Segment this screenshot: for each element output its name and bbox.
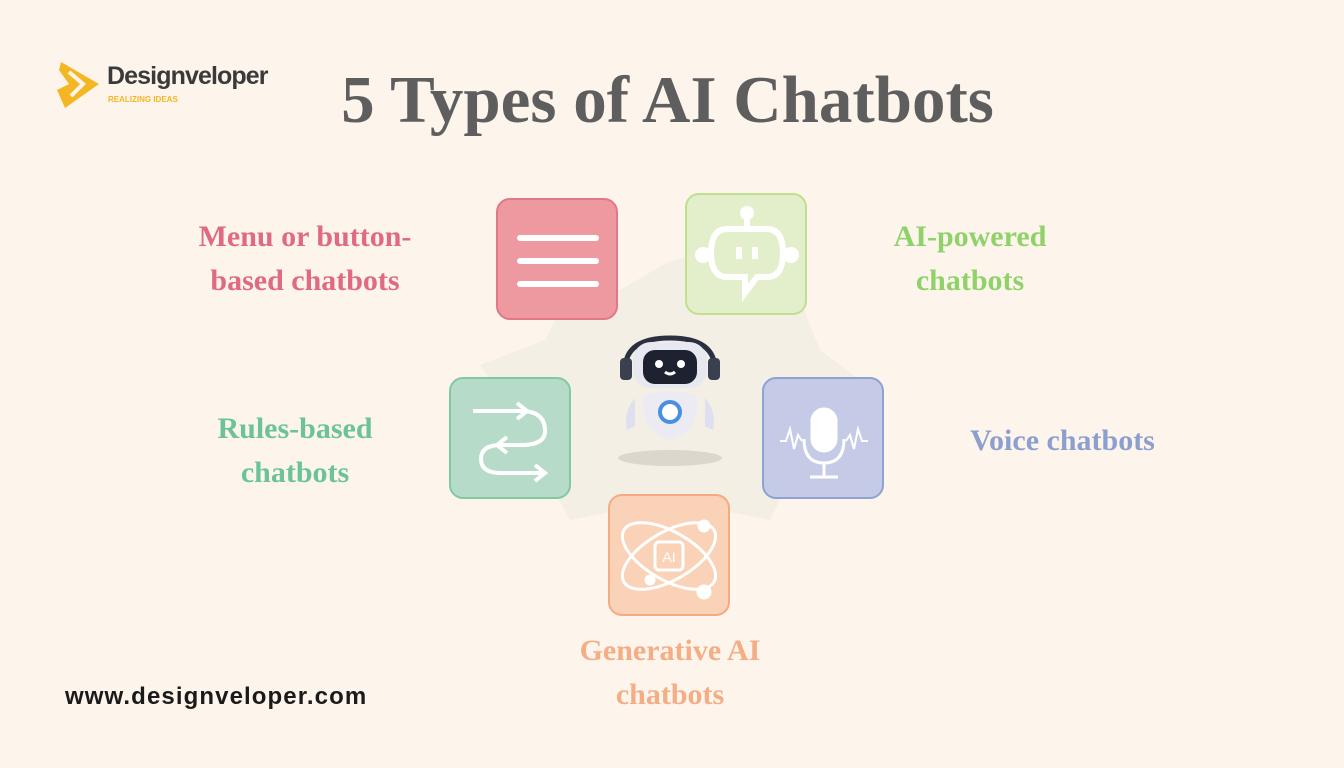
- icon: microphone: [780, 408, 868, 478]
- panel: menu box: [496, 198, 618, 320]
- icon: logo chevron: [57, 62, 99, 108]
- label: voice: Voice chatbots: [970, 424, 1155, 457]
- icon: AI atom: [620, 520, 718, 600]
- logo: REALIZING IDEAS: [108, 95, 178, 104]
- label: rules: Rules-based: [217, 412, 373, 445]
- panel: rules box: [449, 377, 571, 499]
- label: rules: [217, 412, 373, 489]
- panel: AI-powered box: [685, 193, 807, 315]
- label: rules: chatbots: [241, 456, 349, 489]
- logo: [57, 62, 268, 108]
- label: AI-powered: chatbots: [916, 264, 1024, 297]
- logo text: Designveloper: [107, 62, 268, 90]
- label: menu: [199, 220, 411, 297]
- icon: chat bot: [695, 206, 799, 302]
- icon: central robot: [618, 336, 722, 466]
- label: generative: [580, 634, 760, 711]
- panel: generative box: [608, 494, 730, 616]
- label: AI-powered: AI-powered: [894, 220, 1046, 253]
- label: AI-powered: [894, 220, 1046, 297]
- icon: flow arrows: [473, 402, 548, 482]
- label: menu: based chatbots: [210, 264, 400, 297]
- label: generative: chatbots: [616, 678, 724, 711]
- icon: menu lines: [517, 235, 599, 287]
- footer url: www.designveloper.com: [65, 683, 367, 710]
- label: generative: Generative AI: [580, 634, 760, 667]
- title: 5 Types of AI Chatbots: [341, 63, 994, 137]
- panel: voice box: [762, 377, 884, 499]
- icon: AI atom: AI: [662, 549, 676, 565]
- label: menu: Menu or button-: [199, 220, 411, 253]
